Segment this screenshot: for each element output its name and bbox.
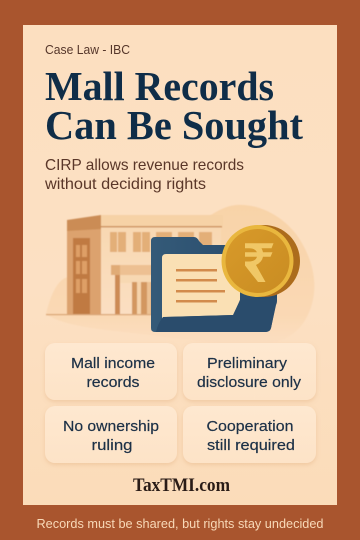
card: Preliminary disclosure only: disclosure only [197, 374, 302, 391]
card: No ownership ruling [45, 406, 177, 463]
entrance canopy [111, 265, 161, 275]
background blob [46, 205, 314, 346]
icon: rupee coin [222, 225, 300, 297]
card: No ownership ruling: No ownership [63, 418, 159, 435]
card: Preliminary disclosure only [183, 343, 316, 400]
subtitle [44, 157, 244, 193]
illustration: building, folder and coin [46, 205, 314, 346]
side door with panes [73, 238, 90, 315]
card: Cooperation still required: Cooperation [206, 418, 294, 435]
card: Mall income records: records [86, 374, 140, 391]
title: Mall Records [45, 63, 274, 109]
side wall [67, 229, 101, 315]
folder [151, 237, 277, 332]
front windows [110, 232, 212, 252]
roof band [101, 215, 223, 226]
brand: TaxTMI.com: TaxTMI.com [133, 476, 231, 496]
front wall [101, 227, 221, 315]
eyebrow: Case Law - IBC: Case Law - IBC [45, 43, 130, 57]
ground line [46, 314, 156, 315]
icon: rupee symbol [245, 243, 274, 282]
title: Can Be Sought [45, 102, 303, 148]
folder back [151, 237, 277, 332]
subtitle: without deciding rights [44, 176, 206, 193]
subtitle: CIRP allows revenue records [45, 157, 244, 174]
document lines [176, 269, 225, 302]
title [45, 63, 303, 148]
card: Mall income records [45, 343, 177, 400]
footer caption: Records must be shared, but rights stay undecided [36, 516, 324, 531]
document sheet [162, 254, 240, 320]
card: No ownership ruling: ruling [92, 437, 132, 454]
card: Mall income records: Mall income [71, 355, 155, 372]
main panel [23, 25, 337, 505]
card: Preliminary disclosure only: Preliminary [207, 355, 288, 372]
side wall top band [67, 215, 101, 231]
card: Cooperation still required [183, 406, 316, 463]
folder front [156, 298, 277, 332]
card: Cooperation still required: still required [207, 437, 295, 454]
building [46, 215, 223, 315]
